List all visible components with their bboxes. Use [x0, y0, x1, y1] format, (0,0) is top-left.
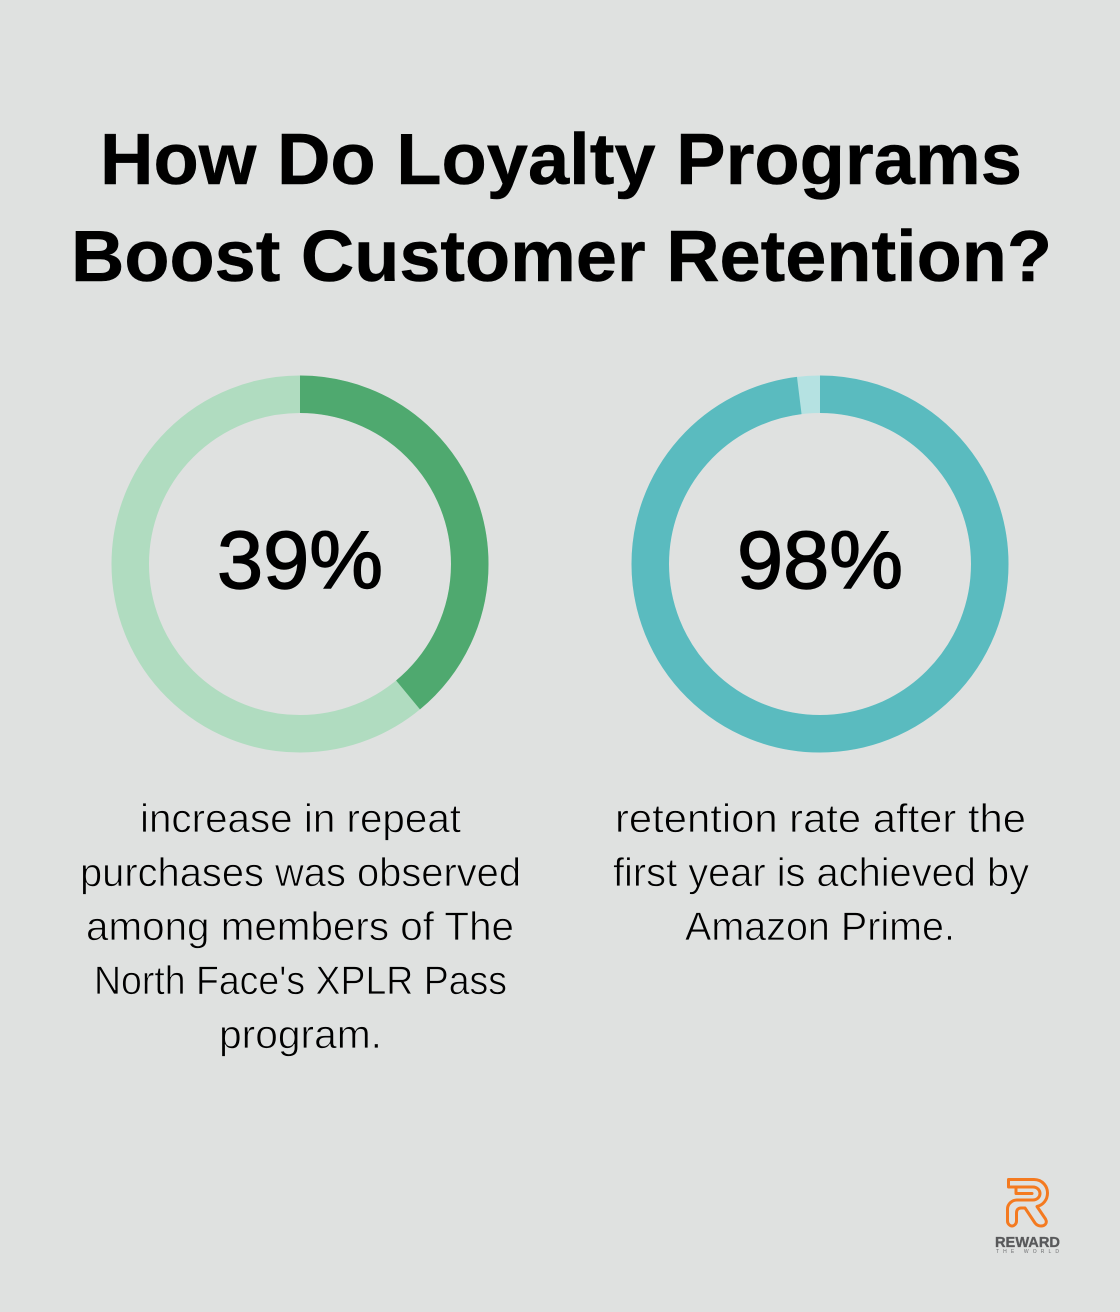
title: How Do Loyalty Programs [100, 120, 1022, 200]
logo: Reward the World [995, 1180, 1060, 1255]
description: retention rate: retention rate after the [615, 797, 1026, 841]
description: retention rate: first year is achieved by [613, 851, 1029, 895]
tagline: THE WORLD [996, 1249, 1059, 1255]
panel: 98% stat [613, 394, 1029, 949]
description: repeat purchases: North Face's XPLR Pass [94, 959, 507, 1003]
donut chart: 39% [130, 394, 470, 734]
stat value: 98%: 98% [737, 515, 903, 606]
description: repeat purchases [80, 797, 521, 1057]
donut chart: 98% [650, 394, 990, 734]
description: retention rate [613, 797, 1029, 949]
description: repeat purchases: purchases was observed [80, 851, 521, 895]
panel: 39% stat [80, 394, 521, 1057]
title: Boost Customer Retention? [71, 217, 1052, 297]
description: repeat purchases: increase in repeat [140, 797, 461, 841]
wordmark: REWARD [995, 1234, 1060, 1251]
title [71, 120, 1052, 297]
description: repeat purchases: program. [219, 1013, 382, 1057]
icon: R mark [1008, 1180, 1048, 1226]
description: retention rate: Amazon Prime. [685, 905, 955, 949]
stat value: 39%: 39% [217, 515, 383, 606]
description: repeat purchases: among members of The [86, 905, 514, 949]
